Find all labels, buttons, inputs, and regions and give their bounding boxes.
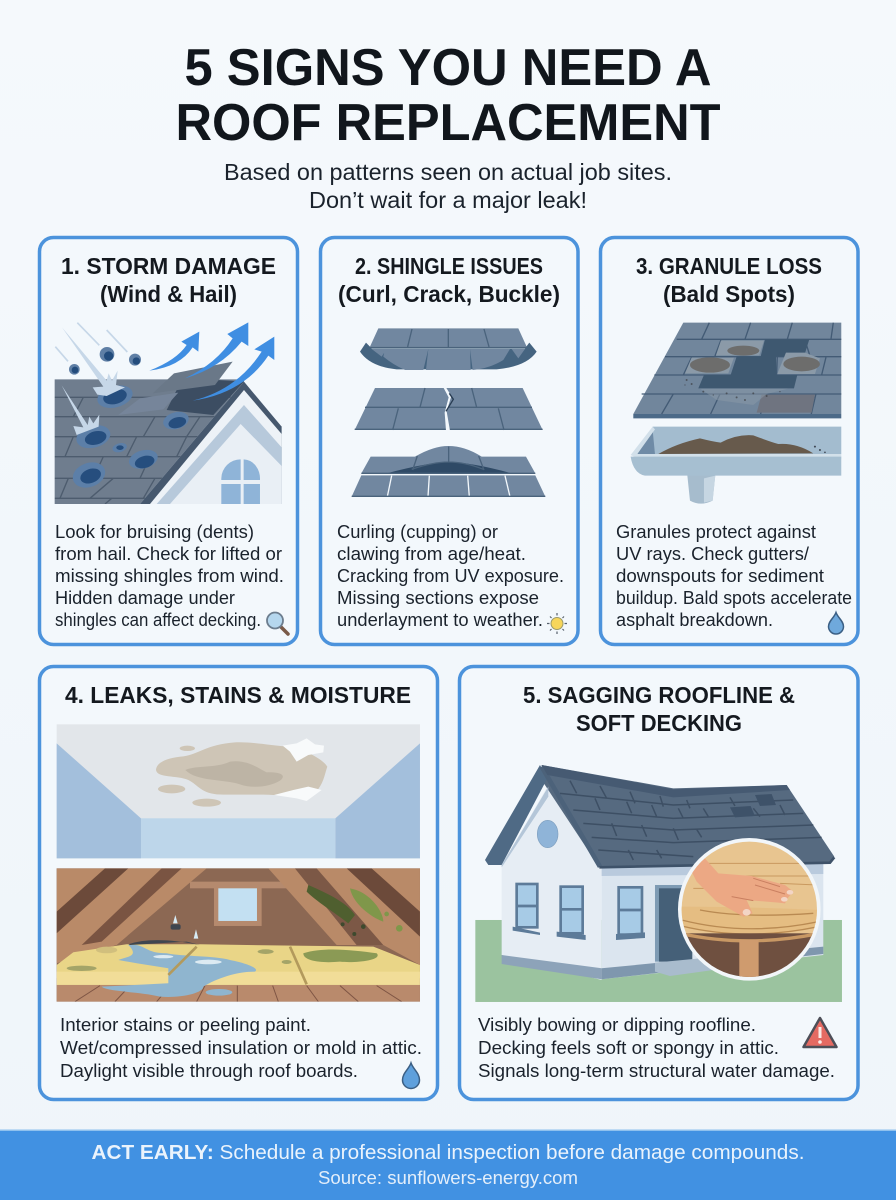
title: 5 SIGNS YOU NEED A xyxy=(184,39,712,97)
panel: 3. granule loss xyxy=(600,238,858,644)
hail dents xyxy=(95,382,135,412)
subtitle xyxy=(224,159,672,213)
panel: 4. leaks stains moisture xyxy=(40,666,438,1100)
illustration: hail and wind damaged roof xyxy=(55,322,282,504)
text: leaks xyxy=(60,1015,422,1081)
hailstones xyxy=(100,347,114,362)
text: storm damage: shingles can affect decking. xyxy=(55,610,261,630)
text: granule loss: downspouts for sediment xyxy=(616,566,824,586)
inset: decking with hand xyxy=(678,838,821,981)
illustration: house with sagging roof xyxy=(475,765,842,1002)
heading: storm damage xyxy=(61,253,276,307)
buckled shingles xyxy=(352,446,545,497)
text: leaks: Wet/compressed insulation or mold in attic. xyxy=(60,1038,422,1058)
text: storm damage: Look for bruising (dents) xyxy=(55,522,254,542)
heading: granule loss: (Bald Spots) xyxy=(663,281,795,307)
windows xyxy=(517,884,642,935)
text: leaks: Daylight visible through roof boards. xyxy=(60,1061,358,1081)
house walls xyxy=(502,785,602,980)
source: Source: sunflowers-energy.com xyxy=(318,1168,578,1188)
icon: magnifying glass xyxy=(267,612,288,634)
bald shingles xyxy=(633,323,841,418)
curled shingles xyxy=(360,328,537,370)
heading: granule loss xyxy=(636,253,822,307)
panel: 2. shingle issues xyxy=(320,238,578,644)
roof xyxy=(542,765,834,867)
text: granule loss: asphalt breakdown. xyxy=(616,610,773,630)
text: sagging: Visibly bowing or dipping roofline. xyxy=(478,1015,756,1035)
text: shingle issues xyxy=(337,522,564,630)
heading: storm damage: (Wind & Hail) xyxy=(100,281,237,307)
wind arrows xyxy=(149,322,274,401)
hole under lifted shingles xyxy=(167,380,244,415)
heading: storm damage: 1. STORM DAMAGE xyxy=(61,253,276,279)
illustration: wet moldy attic xyxy=(57,868,420,1002)
text: sagging: Decking feels soft or spongy in attic. xyxy=(478,1038,779,1058)
gable xyxy=(140,382,282,504)
impact stars and trails xyxy=(62,327,125,435)
heading: shingle issues: (Curl, Crack, Buckle) xyxy=(338,281,560,307)
title xyxy=(176,39,721,152)
text: leaks: Interior stains or peeling paint. xyxy=(60,1015,311,1035)
text: shingle issues: Missing sections expose xyxy=(337,588,539,608)
heading: shingle issues xyxy=(338,253,560,307)
cracked shingles xyxy=(355,387,543,431)
text: granule loss xyxy=(616,522,852,630)
illustration: stained ceiling xyxy=(57,724,420,858)
panel: 1. storm damage xyxy=(40,238,298,644)
call to action: ACT EARLY: Schedule a professional inspection before damage compounds. xyxy=(92,1142,805,1164)
icon: sun xyxy=(547,613,567,634)
text: sagging xyxy=(478,1015,835,1081)
text: sagging: Signals long-term structural water damage. xyxy=(478,1061,835,1081)
panel: 5. sagging roofline xyxy=(460,666,858,1100)
icon: water drop xyxy=(402,1063,420,1088)
text: shingle issues: Cracking from UV exposure. xyxy=(337,566,564,586)
heading: sagging: 5. SAGGING ROOFLINE & xyxy=(523,682,795,708)
heading: sagging xyxy=(523,682,795,736)
heading: shingle issues: 2. SHINGLE ISSUES xyxy=(355,253,543,279)
subtitle: Don’t wait for a major leak! xyxy=(309,187,587,213)
illustration: bald shingle patch and gutter sediment xyxy=(631,323,841,504)
illustration: curled cracked buckled shingles xyxy=(352,328,545,497)
gutter xyxy=(631,427,841,504)
text: shingle issues: Curling (cupping) or xyxy=(337,522,498,542)
text: shingle issues: clawing from age/heat. xyxy=(337,544,526,564)
title: ROOF REPLACEMENT xyxy=(176,94,721,152)
text: granule loss: buildup. Bald spots accelerate xyxy=(616,588,852,608)
text: storm damage xyxy=(55,522,284,630)
heading: leaks: 4. LEAKS, STAINS & MOISTURE xyxy=(65,682,411,708)
text: storm damage: Hidden damage under xyxy=(55,588,235,608)
icon: water drop xyxy=(828,612,844,634)
text: storm damage: from hail. Check for lifted or xyxy=(55,544,282,564)
text: shingle issues: underlayment to weather. xyxy=(337,610,543,630)
footer banner xyxy=(0,1130,896,1200)
heading: sagging: SOFT DECKING xyxy=(576,710,742,736)
heading: granule loss: 3. GRANULE LOSS xyxy=(636,253,822,279)
subtitle: Based on patterns seen on actual job sites. xyxy=(224,159,672,185)
icon: warning triangle xyxy=(804,1018,836,1047)
text: granule loss: UV rays. Check gutters/ xyxy=(616,544,809,564)
text: granule loss: Granules protect against xyxy=(616,522,816,542)
text: storm damage: missing shingles from wind. xyxy=(55,566,284,586)
